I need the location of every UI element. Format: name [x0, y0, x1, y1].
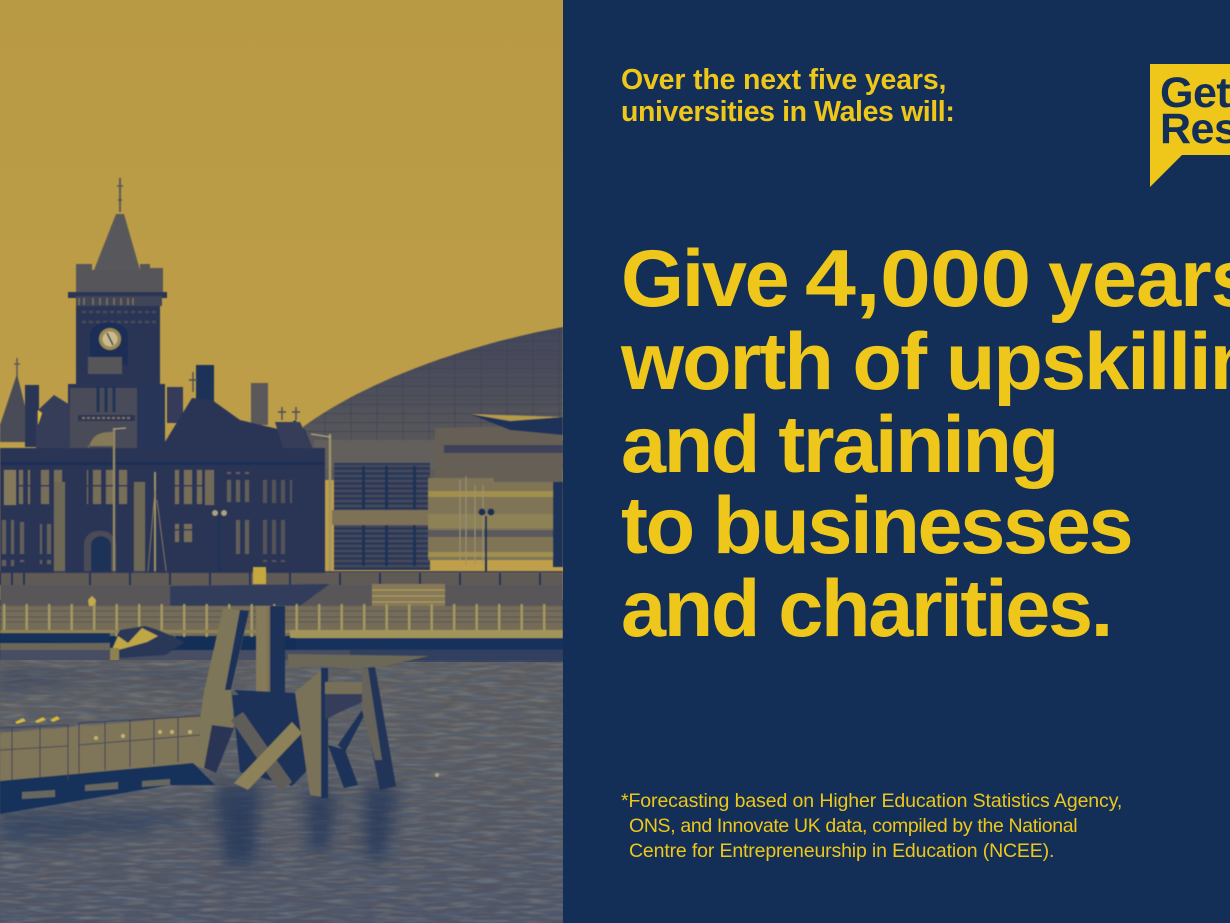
clock tower — [68, 264, 167, 470]
sky — [0, 0, 563, 600]
headline — [620, 234, 1230, 654]
quay wall and promenade — [0, 567, 563, 612]
headline: and charities. — [621, 564, 1111, 654]
headline: Give — [621, 234, 788, 324]
intro heading: universities in Wales will: — [621, 96, 954, 128]
tower lower section — [70, 384, 165, 474]
logo: speech bubble: Get — [1160, 69, 1230, 117]
dark glass building — [332, 463, 430, 570]
right roofs and chimneys — [160, 365, 322, 470]
left big post — [193, 608, 249, 773]
panel: navy text panel — [563, 0, 1230, 923]
moored yacht — [110, 626, 185, 666]
footnote: *Forecasting based on Higher Education Statistics Agency, — [621, 790, 1122, 812]
headline: 4,000 — [805, 234, 1031, 324]
headline: to businesses — [621, 481, 1131, 571]
harbour water — [0, 650, 563, 923]
timber dolphin structure — [193, 606, 429, 798]
upright post — [295, 668, 328, 798]
right leg — [362, 667, 396, 790]
clock face — [99, 328, 121, 350]
panel: duotone photo of Cardiff Bay — [0, 0, 564, 923]
rear dark frame — [232, 695, 325, 786]
waterfront pier with railings — [0, 604, 563, 670]
logo: speech bubble — [1150, 64, 1230, 187]
arena dome — [303, 327, 564, 490]
headline: and training — [621, 400, 1057, 490]
beam — [234, 690, 317, 712]
lower windows — [2, 518, 288, 566]
rear posts — [256, 606, 285, 695]
left turret and roofs — [0, 358, 70, 450]
tower spire — [94, 178, 140, 270]
floating pontoon walkway — [0, 716, 439, 814]
intro heading: Over the next five years, — [621, 64, 946, 96]
footnote: Centre for Entrepreneurship in Education (NCEE). — [629, 840, 1054, 862]
X braces — [231, 712, 292, 792]
crossbar — [325, 694, 372, 720]
entrance arch and pillars — [54, 482, 145, 574]
tan block building — [428, 476, 563, 572]
upper windows — [4, 467, 292, 505]
Pierhead building — [0, 178, 325, 576]
lamp posts and masts — [114, 428, 330, 640]
main facade — [0, 448, 325, 576]
deck — [288, 654, 429, 670]
footnote: ONS, and Innovate UK data, compiled by the National — [629, 815, 1077, 837]
